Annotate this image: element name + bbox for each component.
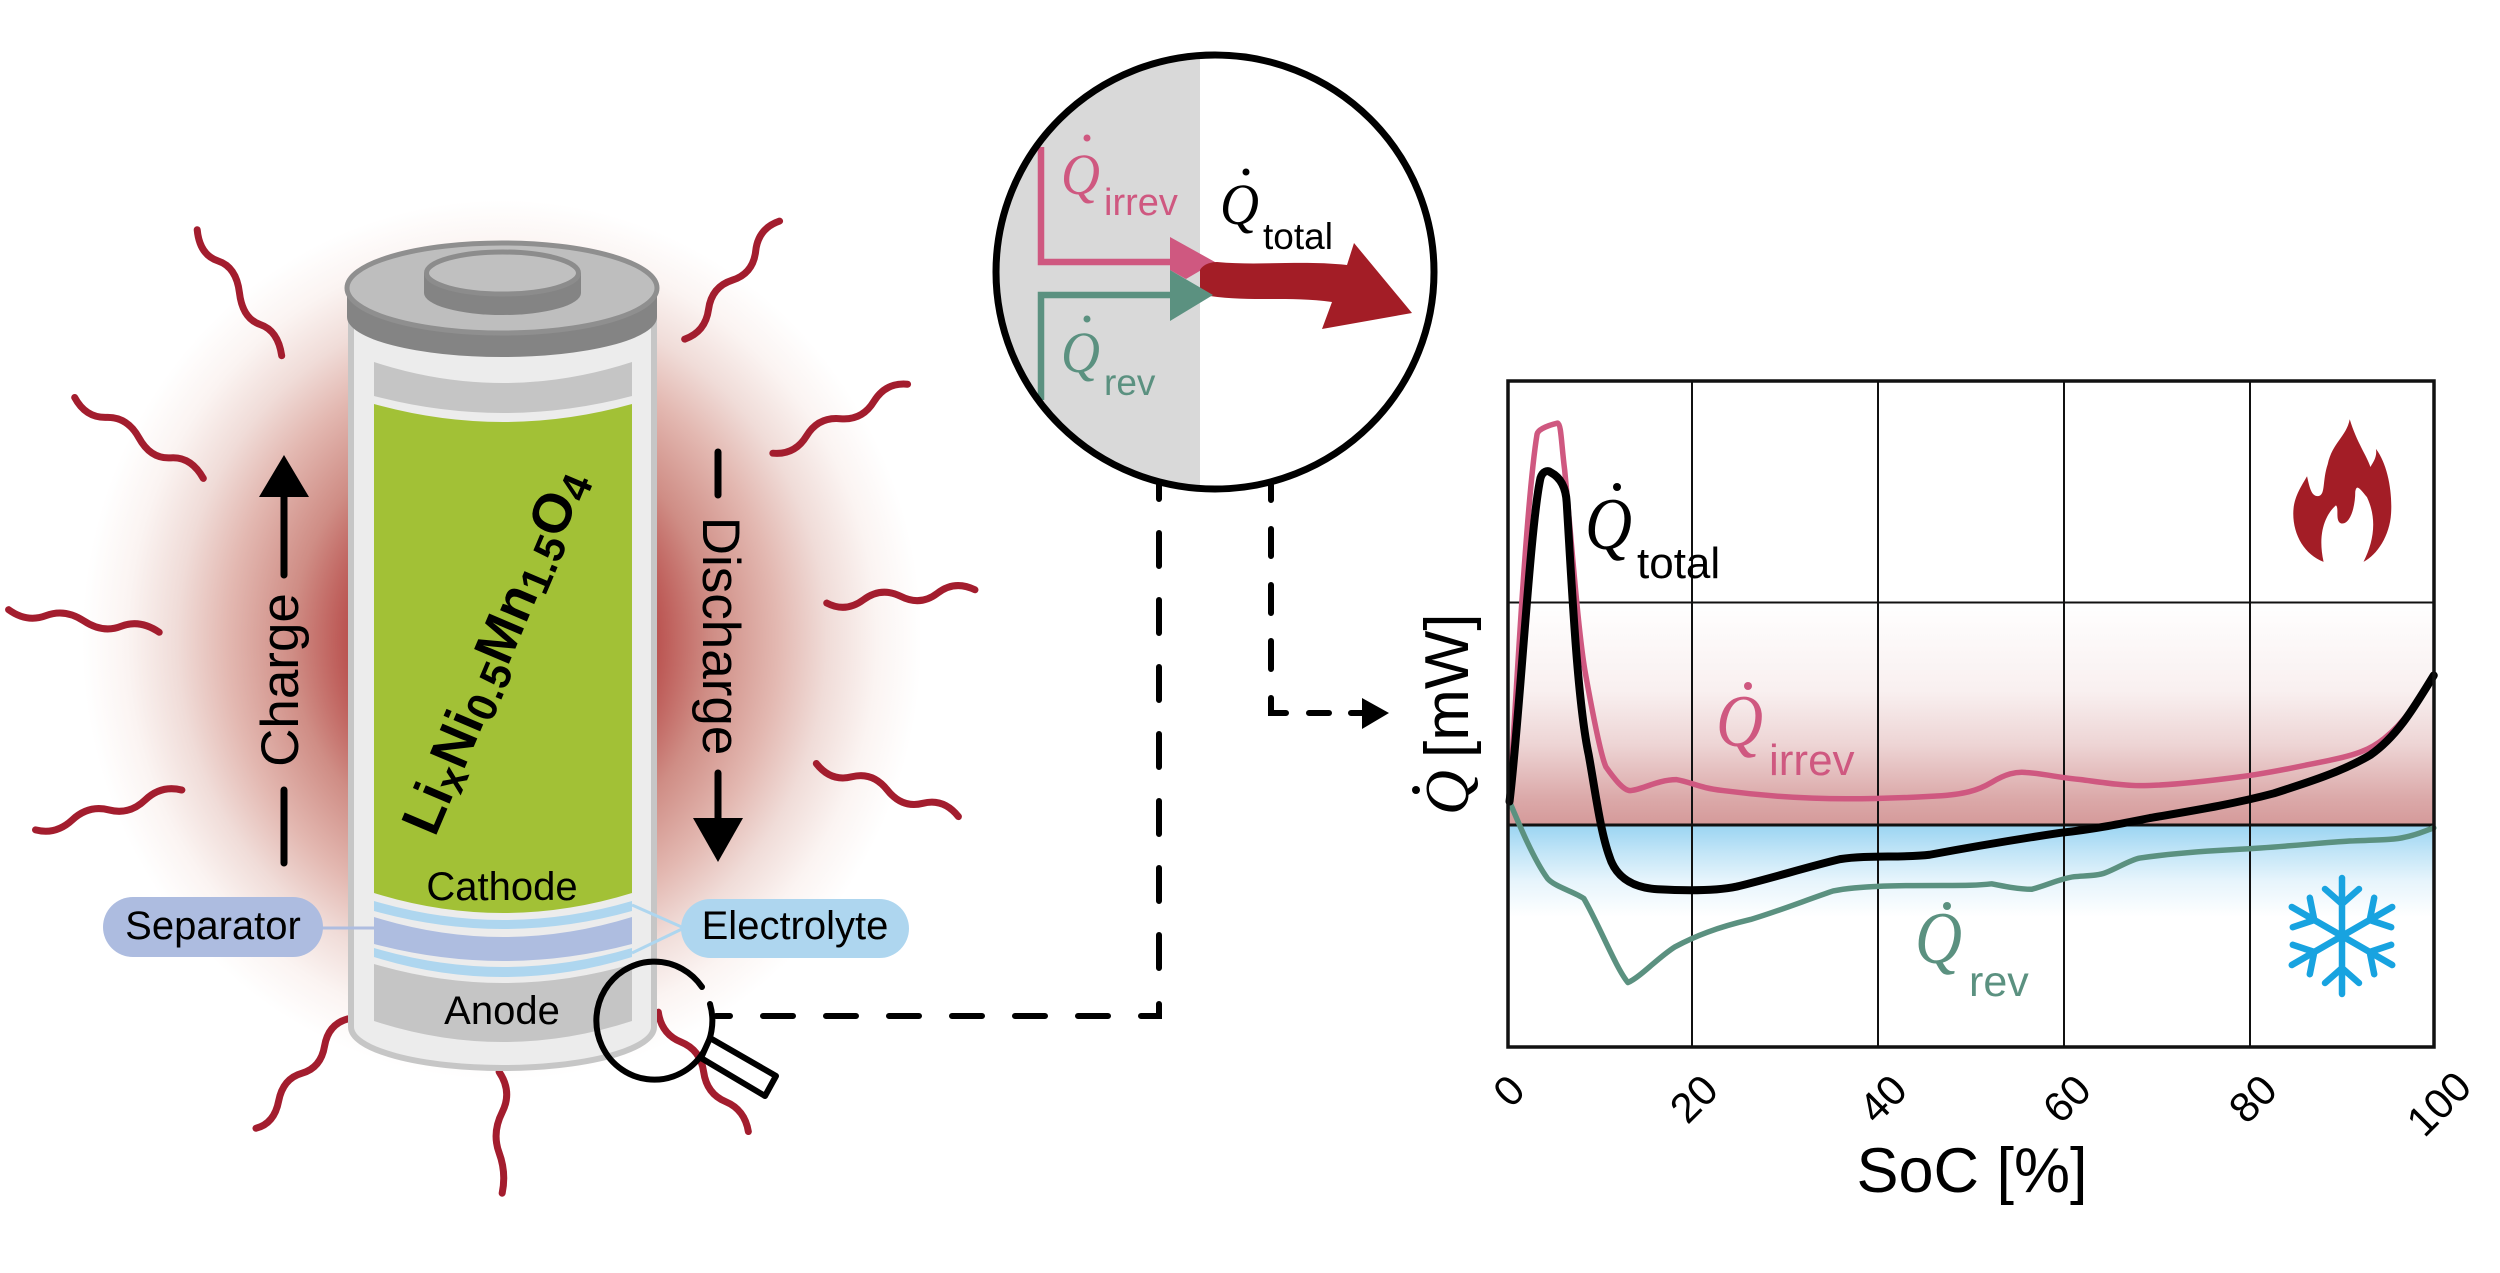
label: Q irrev [1061, 134, 1178, 224]
exothermic shading [1508, 602, 2434, 825]
label: Q rev: rev [1104, 362, 1156, 403]
reversible heat path [1041, 270, 1213, 400]
cathode formula: x [426, 759, 478, 799]
anode label: Anode [444, 989, 560, 1033]
cathode formula: Ni [417, 701, 496, 776]
curve: Q irrev [1510, 423, 2434, 802]
anode layer [374, 964, 632, 1042]
y axis label: [mW] [1413, 613, 1482, 758]
curve: Q rev [1510, 802, 2434, 983]
electrolyte layer lower [374, 948, 632, 977]
electrolyte callout [632, 899, 909, 958]
curve label: Q rev: Q [1915, 898, 1962, 980]
curve label: Q rev [1915, 898, 2029, 1006]
electrolyte layer upper [374, 901, 632, 929]
cathode formula: O [515, 481, 589, 545]
cathode formula: Li [389, 773, 465, 843]
curve label: Q total: Q [1585, 484, 1632, 566]
dashed connector from magnifier to lens [716, 485, 1159, 1016]
electrolyte callout: Electrolyte [702, 904, 888, 948]
x axis tick labels: 40 [1850, 1066, 1916, 1132]
magnifying glass [596, 962, 776, 1096]
battery cell [347, 243, 657, 1068]
label: Q irrev: Q [1061, 143, 1100, 207]
chart curves [1510, 423, 2434, 983]
curve label: Q irrev: Q [1716, 681, 1763, 763]
curve label: Q rev: rev [1969, 958, 2029, 1006]
label: Q total: total [1263, 216, 1333, 257]
battery body [351, 300, 654, 1068]
label: Q total [1220, 168, 1333, 257]
cathode label: Cathode [426, 865, 578, 909]
label: Q rev: Q [1061, 321, 1100, 385]
x axis tick labels: 20 [1661, 1066, 1727, 1132]
x axis label: SoC [%] [1856, 1136, 2088, 1206]
snowflake icon [2283, 878, 2401, 994]
x axis tick labels: 60 [2034, 1066, 2100, 1132]
separator callout [103, 897, 374, 957]
dashed arrow from lens to chart [1271, 485, 1389, 729]
x axis tick labels: 0 [1484, 1066, 1534, 1116]
magnified heat flow lens [990, 50, 1434, 495]
curve label: Q irrev [1716, 681, 1855, 785]
cathode formula: Mn [462, 574, 550, 672]
endothermic shading [1508, 825, 2434, 917]
label: Q irrev: irrev [1104, 182, 1178, 224]
grid lines [1508, 381, 2434, 1047]
label: Q total: Q [1220, 173, 1259, 237]
charge arrow: Charge [251, 593, 310, 767]
curve: Q total [1510, 471, 2434, 890]
flame icon [2293, 419, 2391, 562]
label: Q rev [1061, 316, 1156, 403]
discharge arrow [691, 452, 750, 862]
irreversible heat path [1041, 147, 1215, 279]
upper gray layer [374, 362, 632, 413]
cell half shading [990, 50, 1200, 495]
heat waves radiating from battery [9, 221, 975, 1193]
separator layer [374, 917, 632, 961]
chart frame [1508, 381, 2434, 1047]
curve label: Q total: total [1637, 539, 1720, 588]
charge arrow [251, 455, 310, 863]
separator callout: Separator [125, 904, 301, 948]
x axis tick labels: 100 [2397, 1062, 2480, 1145]
cathode formula: 4 [550, 467, 602, 507]
lens outline [996, 55, 1434, 489]
cathode formula: 0.5 [456, 655, 522, 727]
curve label: Q irrev: irrev [1769, 736, 1855, 785]
battery cap [347, 243, 657, 357]
x axis tick labels: 80 [2220, 1066, 2286, 1132]
total heat arrow [1200, 243, 1412, 329]
cathode formula: 1.5 [510, 528, 576, 600]
curve label: Q total [1585, 483, 1720, 588]
y axis label: Q [1414, 770, 1482, 815]
x axis tick labels [1484, 1062, 2480, 1145]
discharge arrow: Discharge [691, 517, 750, 755]
heat glow around battery [82, 200, 922, 1080]
heat vs SoC chart [1412, 381, 2480, 1206]
cathode layer [374, 404, 632, 913]
